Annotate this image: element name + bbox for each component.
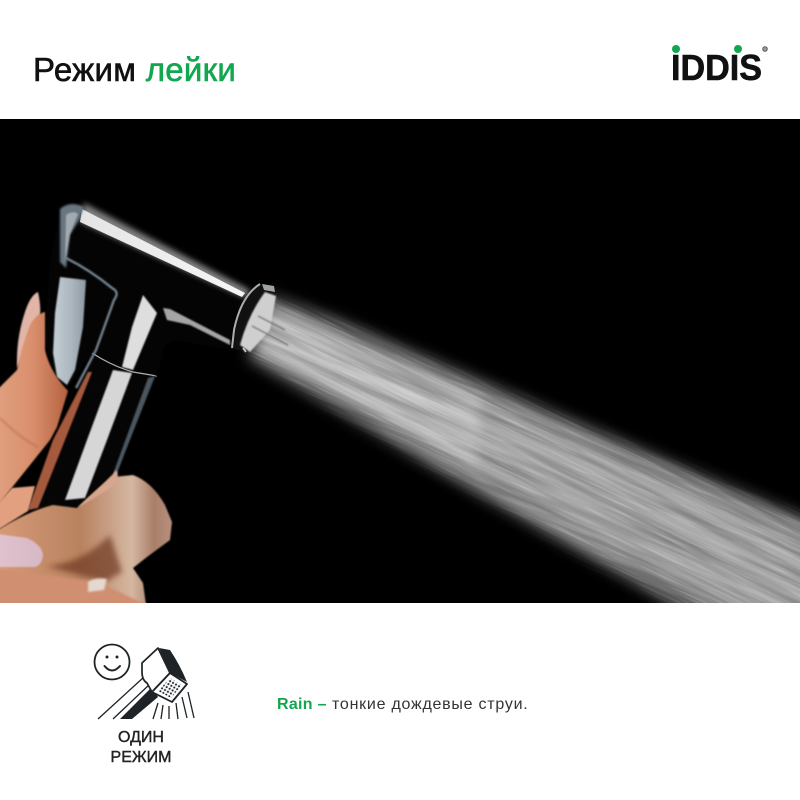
copper finger reflection on tube: [28, 372, 92, 510]
back cap reflection: [60, 204, 84, 268]
index finger with nail: [0, 292, 68, 515]
nozzle face with dots: [152, 673, 187, 702]
thumb nail: [0, 533, 43, 567]
chrome grip reflection: [53, 277, 86, 385]
top glow: [80, 203, 250, 298]
tube edge reflection: [113, 376, 155, 476]
lower tube of the shower head: [28, 353, 157, 512]
top highlight: [80, 209, 245, 297]
thumb and fingers: [0, 470, 172, 612]
icon label: ОДИН: [118, 729, 164, 746]
centre neck highlight: [122, 295, 157, 370]
photo background: [0, 119, 800, 603]
icon label: РЕЖИМ: [111, 749, 171, 766]
photo: hygienic shower head with rain spray: [0, 119, 800, 603]
tube highlight: [65, 370, 132, 500]
lower head reflection: [163, 308, 230, 345]
logo: IDDIS: IDDIS: [671, 47, 762, 88]
handle: [98, 677, 150, 719]
title: Режим лейки: [33, 51, 236, 88]
shower head body: [45, 203, 288, 388]
middle finger behind thumb: [0, 486, 35, 535]
water spray: [240, 288, 800, 603]
shower head body: [142, 648, 170, 692]
caption: Rain – тонкие дождевые струи.: [277, 696, 528, 713]
trigger curve reflection: [66, 258, 117, 388]
icon label: [111, 729, 171, 766]
water jets: [153, 692, 194, 719]
collar ring: [232, 284, 273, 353]
smiley: [94, 644, 130, 680]
nozzle face: [240, 292, 276, 352]
